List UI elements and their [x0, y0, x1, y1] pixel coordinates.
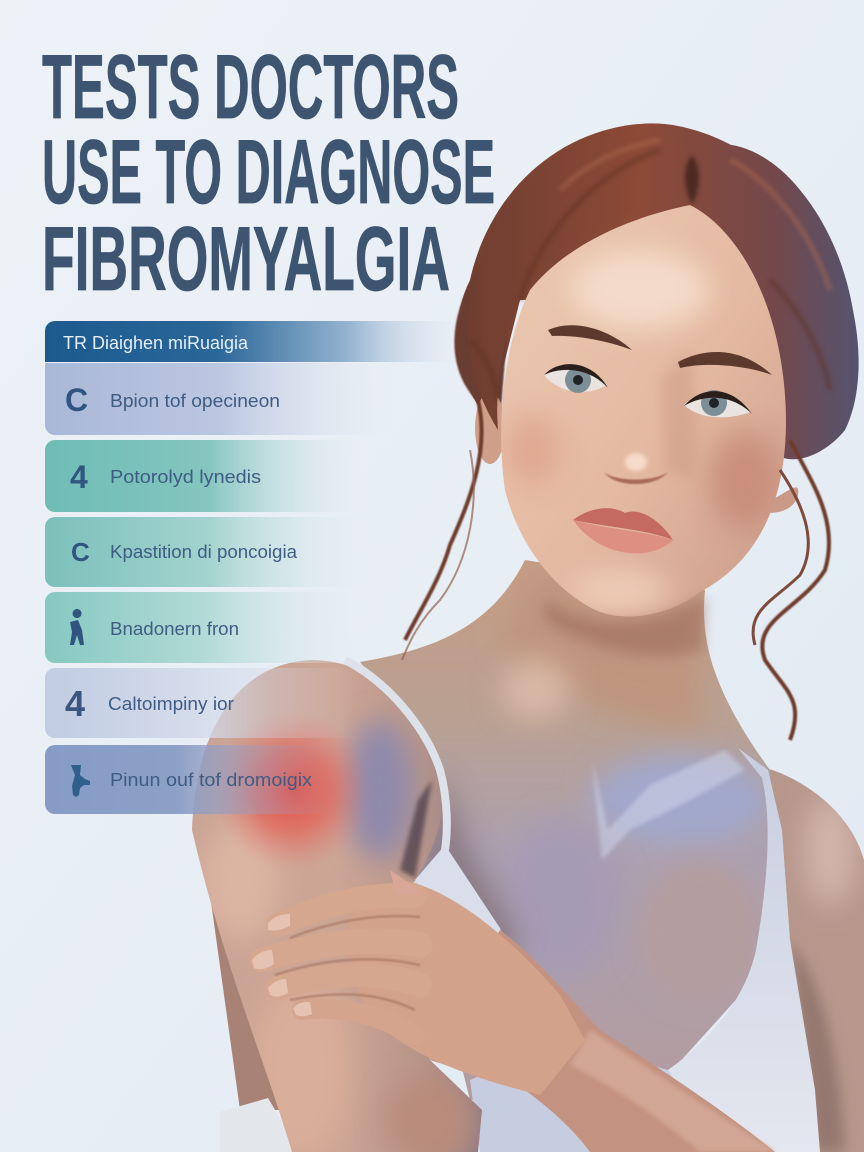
icon: standing person: [70, 609, 84, 645]
chest blue sheen: [590, 755, 770, 845]
row 4: Bnadonern fron: [110, 619, 239, 639]
arm shading: [200, 720, 475, 1152]
back arm: [208, 880, 300, 1110]
row 1: C: [65, 382, 88, 418]
row 3: [45, 517, 370, 587]
row 1: Bpion tof opecineon: [110, 391, 280, 411]
eyebrow left: [548, 325, 632, 350]
nose: [604, 453, 668, 484]
illustration: woman holding shoulder: [192, 123, 864, 1152]
row 3: C: [71, 537, 90, 567]
row 6: [45, 745, 335, 814]
chin shadow: [545, 596, 705, 656]
neck highlight: [501, 660, 569, 720]
camisole strap: [345, 660, 447, 850]
hair front: [468, 124, 857, 453]
title: [42, 37, 495, 310]
panel: diagnostic test list: [45, 321, 450, 814]
eye left: [544, 364, 608, 393]
white top at lower left: [220, 1098, 300, 1152]
row 2: Potorolyd lynedis: [110, 467, 261, 487]
right shoulder and arm: [769, 769, 864, 1152]
camisole left panel: [415, 845, 510, 1000]
forearm: [430, 930, 775, 1152]
list header: [45, 321, 450, 362]
eye right: [684, 390, 752, 417]
title: TESTS DOCTORS: [42, 37, 459, 138]
camisole right panel: [668, 748, 820, 1152]
upper arm: [192, 660, 482, 1152]
title: FIBROMYALGIA: [42, 209, 450, 310]
lips: [573, 508, 673, 553]
facial shading: [504, 250, 781, 610]
row 5: [45, 668, 355, 738]
row 6: Pinun ouf tof dromoigix: [110, 770, 312, 790]
camisole lower left panel: [470, 1040, 720, 1152]
face: [501, 205, 786, 616]
left hair bun: [454, 270, 510, 420]
torso and neck: [360, 560, 790, 1100]
hair parting and strands: [402, 140, 830, 740]
hair behind face: [457, 123, 859, 459]
chest shading: [420, 570, 770, 1000]
list header: TR Diaighen miRuaigia: [63, 333, 249, 353]
row 3: Kpastition di poncoigia: [110, 542, 298, 562]
row 2: [45, 440, 370, 512]
row 4: [45, 592, 365, 663]
row 2: 4: [70, 459, 88, 495]
eyebrow right: [678, 352, 772, 375]
collarbone highlights: [592, 750, 745, 860]
armpit shadow: [400, 780, 432, 878]
row 5: Caltoimpiny ior: [108, 694, 234, 714]
row 1: [45, 363, 400, 435]
neck shading: [512, 590, 706, 732]
red pain glow: [214, 710, 370, 870]
hand and fingers: [252, 870, 585, 1095]
icon: body pain figure: [71, 765, 90, 797]
row 5: 4: [65, 683, 85, 724]
ear: [475, 392, 505, 464]
